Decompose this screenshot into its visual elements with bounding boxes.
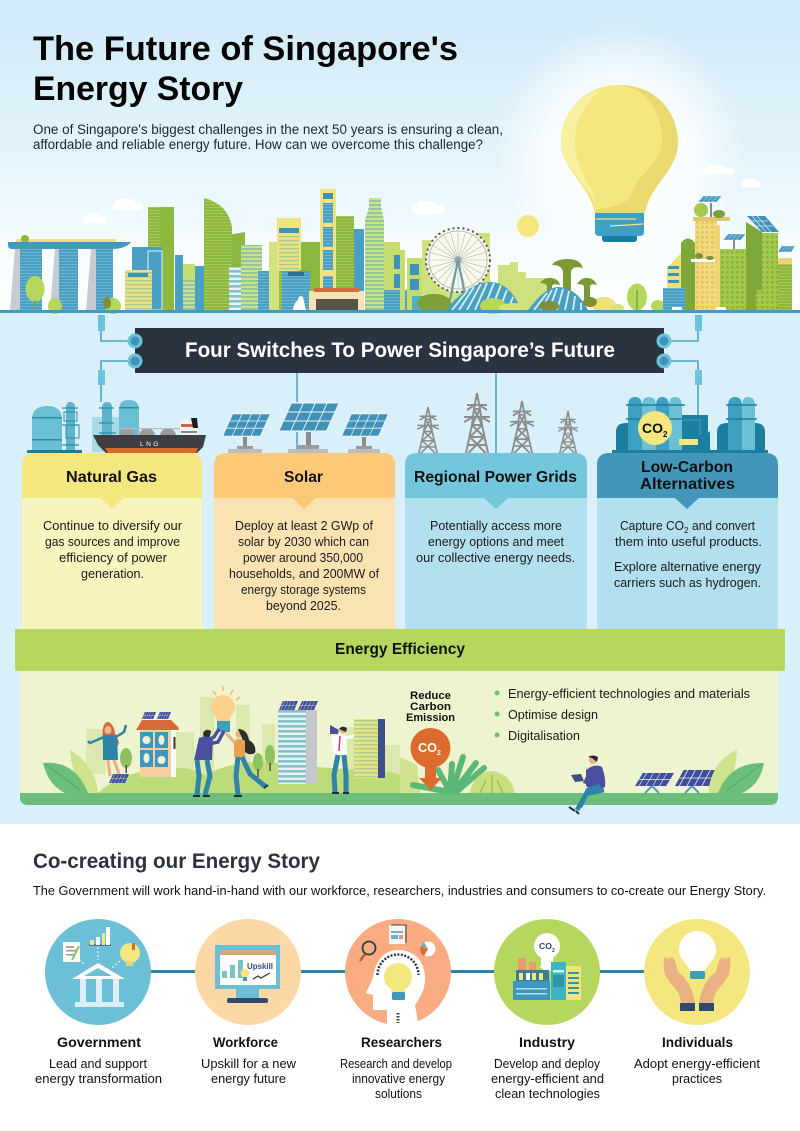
callout: reduce carbon emission	[406, 690, 455, 790]
intro sentence: co-creating: The Government will work hand-in-hand with our workforce, researchers, industries and consumers to co-create our Energy Story.	[33, 884, 766, 898]
illustration: right leaves	[708, 750, 764, 793]
heading: co-creating: Co-creating our Energy Story	[33, 850, 320, 873]
title	[33, 30, 458, 108]
banner: four switches: Four Switches To Power Singapore’s Future	[185, 339, 615, 362]
caption: individuals	[634, 1034, 761, 1086]
caption: government: Lead and support	[49, 1057, 148, 1071]
caption: government	[35, 1034, 162, 1086]
illustration: people lifting a light bulb	[193, 686, 275, 796]
illustration: left leaves	[43, 750, 98, 793]
caption: industry: clean technologies	[495, 1087, 600, 1101]
icon: large light bulb	[561, 85, 678, 242]
connectors: left wires	[98, 315, 135, 402]
ground strip	[20, 793, 778, 805]
skyline: Marina Bay buildings	[384, 233, 490, 310]
sun glow behind bulb	[495, 25, 745, 275]
caption: researchers: Researchers	[361, 1034, 442, 1050]
callout: reduce carbon emission: CO	[418, 740, 437, 755]
skyline: downtown towers	[125, 189, 384, 310]
sky gradient	[0, 0, 800, 311]
caption: individuals: Adopt energy-efficient	[634, 1057, 761, 1071]
caption: individuals: Individuals	[662, 1034, 733, 1050]
panel: low-carbon alternatives: and convert	[692, 518, 755, 533]
panel: regional power grids: Potentially access more	[430, 518, 562, 533]
caption: government: energy transformation	[35, 1072, 162, 1086]
icon: industry: 2	[552, 948, 555, 954]
icon: individuals	[644, 919, 750, 1025]
panel: regional power grids	[405, 453, 587, 630]
panel: solar: energy storage systems	[241, 582, 366, 597]
illustration: woman with solar panel	[88, 722, 132, 783]
title: The Future of Singapore's	[33, 30, 458, 68]
panel: solar: power around 350,000	[243, 550, 363, 565]
illustration: power pylons	[417, 393, 578, 453]
bullet list: Digitalisation	[508, 728, 580, 743]
icon: government	[45, 919, 151, 1025]
caption: industry: energy-efficient and	[491, 1072, 604, 1086]
ground line	[0, 310, 800, 313]
caption: government: Government	[57, 1034, 141, 1050]
caption: workforce: Upskill for a new	[201, 1057, 297, 1071]
title: Energy Story	[33, 70, 243, 108]
caption: workforce: Workforce	[213, 1034, 278, 1050]
illustration: yellow residential building	[354, 719, 385, 778]
panel: natural gas: efficiency of power	[59, 550, 168, 565]
illustration: carbon capture plant	[612, 397, 768, 453]
panel: low-carbon alternatives: Capture CO	[620, 518, 684, 533]
panel: solar: Deploy at least 2 GWp of	[235, 518, 373, 533]
caption: industry: Industry	[519, 1034, 575, 1050]
intro text	[33, 122, 503, 152]
callout: reduce carbon emission: Carbon	[410, 701, 451, 713]
illustration: office tower with solar	[278, 701, 318, 784]
skyline: eco city buildings with solar panels	[663, 196, 795, 310]
intro text: affordable and reliable energy future. How can we overcome this challenge?	[33, 137, 483, 152]
illustration: plants	[400, 757, 515, 793]
icon: workforce: Upskill	[247, 961, 273, 971]
connectors: right wires	[664, 315, 702, 420]
energy efficiency heading bar: Energy Efficiency	[335, 641, 465, 658]
callout: reduce carbon emission: Reduce	[410, 690, 451, 702]
icon: industry	[494, 919, 600, 1025]
panel: solar	[214, 453, 395, 630]
illustration: solar panels	[222, 402, 389, 453]
caption: industry: Develop and deploy	[494, 1057, 601, 1071]
illustration: natural gas plant and LNG ship: LNG	[140, 441, 161, 448]
panel: natural gas	[22, 453, 202, 630]
caption: researchers: Research and develop	[340, 1057, 452, 1071]
illustration: house with solar panels	[136, 712, 179, 777]
bullet list: Optimise design	[508, 707, 598, 722]
illustration: natural gas plant and LNG ship	[27, 400, 206, 453]
panel: natural gas: Continue to diversify our	[43, 518, 183, 533]
panel: natural gas: Natural Gas	[66, 469, 157, 486]
panel: energy efficiency background	[20, 671, 778, 805]
panel: low-carbon alternatives: Alternatives	[640, 476, 735, 493]
panel: regional power grids: Regional Power Grids	[414, 469, 577, 486]
panel: low-carbon alternatives: Low-Carbon	[641, 459, 733, 476]
caption: researchers: solutions	[375, 1087, 422, 1101]
bullet list: Energy-efficient technologies and materials	[508, 686, 750, 701]
small sun	[517, 215, 539, 237]
caption: industry	[491, 1034, 604, 1101]
icon: industry: CO	[539, 942, 552, 951]
caption: individuals: practices	[672, 1072, 722, 1086]
panel: low-carbon alternatives: them into useful products.	[615, 534, 762, 549]
panel: natural gas: generation.	[81, 566, 144, 581]
skyline: Singapore Flyer wheel	[426, 228, 490, 300]
illustration: man with megaphone	[330, 725, 361, 793]
illustration: background city and hills	[86, 697, 400, 793]
panel: low-carbon alternatives: 2	[684, 526, 689, 535]
icon: workforce	[195, 919, 301, 1025]
icon: researchers	[345, 919, 451, 1026]
panel: natural gas: gas sources and improve	[45, 534, 180, 549]
intro text: One of Singapore's biggest challenges in the next 50 years is ensuring a clean,	[33, 122, 503, 137]
panel: solar: beyond 2025.	[266, 598, 341, 613]
panel: regional power grids: our collective energy needs.	[416, 550, 575, 565]
panel: solar: Solar	[284, 469, 323, 486]
energy efficiency heading bar	[15, 629, 785, 671]
caption: researchers	[340, 1034, 452, 1101]
callout: reduce carbon emission: 2	[437, 750, 441, 757]
panel: solar: households, and 200MW of	[229, 566, 379, 581]
banner: four switches	[128, 328, 672, 373]
panel: low-carbon alternatives: Explore alternative energy	[614, 559, 761, 574]
skyline: Gardens by the Bay	[417, 259, 624, 314]
panel: low-carbon alternatives	[597, 453, 778, 630]
illustration: carbon capture plant: 2	[663, 430, 668, 439]
illustration: ground solar panels	[635, 770, 718, 793]
upper blue section background	[0, 0, 800, 824]
bullet list	[494, 686, 750, 743]
connectors: centre wires	[297, 373, 496, 453]
skyline: tree	[627, 284, 665, 312]
skyline: Fullerton building and Merlion	[293, 288, 364, 310]
panel: regional power grids: energy options and meet	[428, 534, 564, 549]
skyline: Marina Bay Sands	[8, 235, 131, 314]
callout: reduce carbon emission: Emission	[406, 712, 455, 724]
connecting line between stakeholders	[98, 970, 698, 973]
illustration: carbon capture plant: CO	[642, 420, 663, 436]
caption: workforce: energy future	[211, 1072, 286, 1086]
clouds	[84, 165, 761, 223]
panel: low-carbon alternatives: carriers such as hydrogen.	[614, 575, 761, 590]
panel: solar: solar by 2030 which can	[238, 534, 369, 549]
illustration: seated person with laptop	[569, 756, 605, 814]
caption: workforce	[201, 1034, 297, 1086]
caption: researchers: innovative energy	[352, 1072, 446, 1086]
